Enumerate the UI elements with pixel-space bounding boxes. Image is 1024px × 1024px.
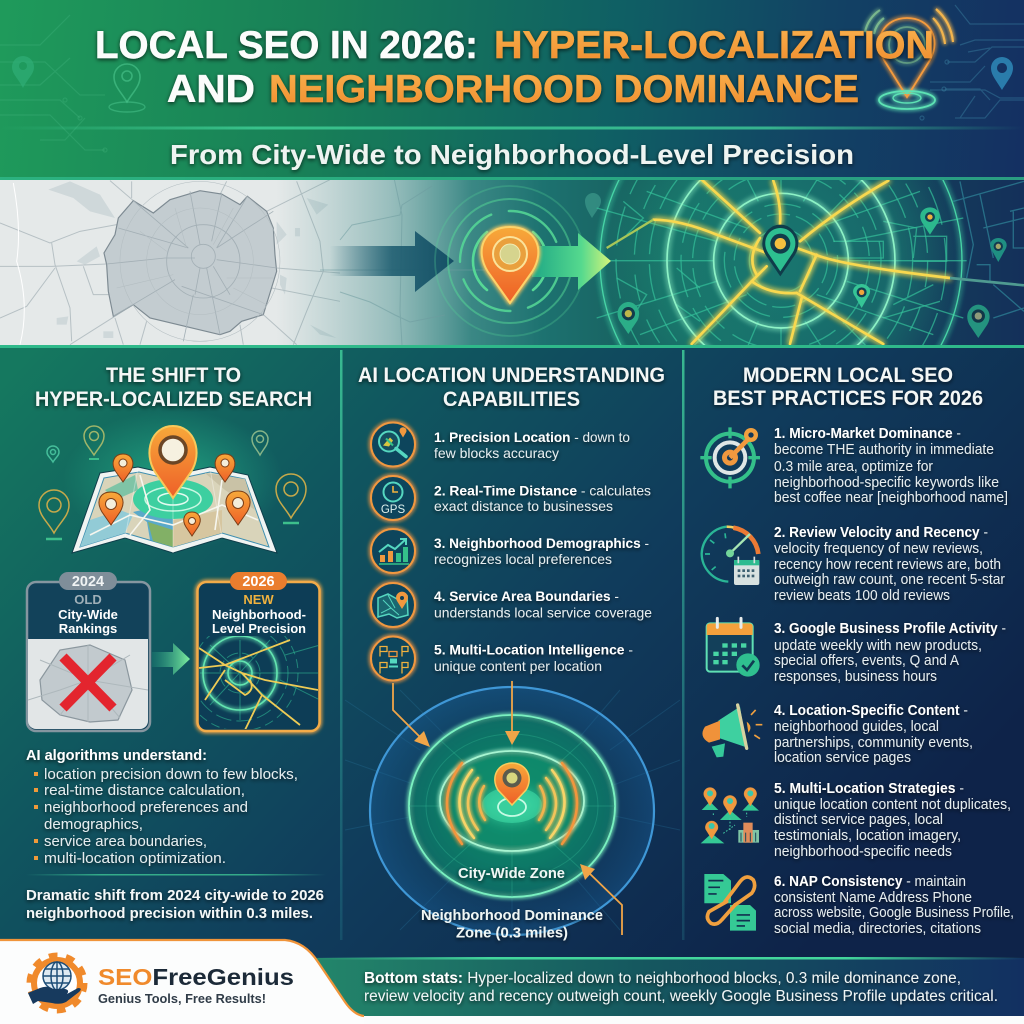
icon: multi-location network [701,787,759,843]
item 2: 2. Real-Time Distance - calculates [434,482,651,498]
icon: right header pin [991,57,1013,90]
practice 4: location service pages [774,750,911,766]
practice 2: review beats 100 old reviews [774,588,950,604]
practice 3: responses, business hours [774,669,937,685]
practice 4: neighborhood guides, local [774,719,939,735]
item 3 [434,535,649,567]
AI algorithms list: demographics, [44,816,143,833]
arrow: dark into pin [330,231,454,292]
practice 3: 3. Google Business Profile Activity - [774,621,1006,637]
item 1: few blocks accuracy [434,445,559,461]
bottom stats bar: Bottom stats: Hyper-localized down to neighborhood blocks, 0.3 mile dominance zone, [364,970,961,987]
item 3: recognizes local preferences [434,551,612,567]
panel: the shift to hyper-localized search [26,363,326,922]
orange bullets [34,772,38,860]
icon: growth chart [379,539,409,564]
zone labels: Zone (0.3 miles) [456,924,568,942]
column dividers [340,350,684,940]
practice 5: 5. Multi-Location Strategies - [774,781,964,797]
logo wordmark [98,964,294,1006]
practice 3: special offers, events, Q and A [774,653,959,669]
title: NEIGHBORHOOD DOMINANCE [269,68,859,111]
practice 5: unique location content not duplicates, [774,797,1011,813]
header banner [0,0,1024,180]
heading [35,363,312,411]
old card labels [58,592,118,636]
practice 4 [774,703,973,766]
item 2 [434,482,651,514]
panel: AI location understanding capabilities [345,363,680,942]
icon: faint map pin [585,193,601,218]
chart: concentric dominance zones [345,680,680,942]
heading: THE SHIFT TO [106,363,241,387]
AI algorithms list: neighborhood preferences and [44,799,248,816]
icon: zone pin [495,763,529,816]
city-wide gray map [0,180,340,345]
icon: outline pins [39,426,306,539]
icon: service area map [378,592,408,618]
practice 2: 2. Review Velocity and Recency - [774,525,988,541]
zone labels: City-Wide Zone [458,865,565,882]
item 5 [434,642,633,674]
heading: MODERN LOCAL SEO [743,363,953,387]
icon: multi-location flags [380,646,408,674]
AI algorithms list: location precision down to few blocks, [44,766,298,783]
old card labels: Rankings [59,621,117,636]
old card labels: City-Wide [58,607,118,622]
new card labels: Level Precision [212,621,306,636]
badge 2026 [230,572,287,590]
item 1 [434,429,630,461]
dramatic shift summary [26,887,324,922]
practice 4: partnerships, community events, [774,735,973,751]
gradient transition overlay [290,180,1024,345]
icon: target [700,427,760,488]
neighborhood street map [596,180,1024,345]
icon: left header pins [12,56,145,112]
icon: magnifier [379,427,406,456]
arcs around central pin [435,186,585,336]
subtitle: From City-Wide to Neighborhood-Level Precision [170,139,854,170]
map band: city-wide to neighborhood [0,180,1024,345]
icon: GPS clock: GPS [381,504,405,516]
icon: glowing header pin [865,9,953,109]
AI algorithms list [26,748,298,867]
icon: logo gear globe hand [28,956,84,1010]
icon: chain link and documents [704,874,756,931]
item 4 [434,588,652,620]
item 4: understands local service coverage [434,604,652,620]
signal arcs [447,763,577,844]
icon: red cross [63,657,113,708]
circuit decoration right [920,5,1024,120]
practice 1 [774,426,1008,506]
practice 1: best coffee near [neighborhood name] [774,490,1008,506]
logo wordmark: SEOFreeGenius [98,964,294,990]
dramatic shift summary: neighborhood precision within 0.3 miles. [26,905,313,922]
heading [713,363,983,410]
panel: modern local SEO best practices [700,363,1014,937]
arrow: green out of pin [532,233,611,290]
badge 2024 [59,572,117,590]
icon: GPS clock [381,482,405,516]
title: LOCAL SEO IN 2026: [95,24,478,67]
faint transition roads [320,178,500,345]
practice 6: consistent Name Address Phone [774,890,972,906]
badge 2024: 2024 [72,574,104,590]
footer [0,940,1024,1024]
arrows: pointing into zones [393,681,622,935]
old card labels: OLD [74,592,102,607]
practice 2: velocity frequency of new reviews, [774,541,983,557]
item 4: 4. Service Area Boundaries - [434,588,619,604]
item 2: exact distance to businesses [434,498,613,514]
practices list [774,426,1014,937]
heading [358,363,665,411]
practice 1: 1. Micro-Market Dominance - [774,426,961,442]
heading: HYPER-LOCALIZED SEARCH [35,387,312,411]
heading: AI LOCATION UNDERSTANDING [358,363,665,387]
item 5: 5. Multi-Location Intelligence - [434,642,633,658]
practice 3 [774,621,1006,685]
white logo panel [0,940,364,1024]
circuit decoration left [0,15,107,152]
item 1: 1. Precision Location - down to [434,429,630,445]
AI algorithms list: AI algorithms understand: [26,748,207,764]
arrow: old to new [152,643,190,675]
zone labels [421,865,603,942]
icon: center teal pin [762,225,798,276]
dramatic shift summary: Dramatic shift from 2024 city-wide to 2026 [26,887,324,904]
new card labels [212,592,306,636]
title [95,24,934,111]
practice 5: neighborhood-specific needs [774,844,952,860]
icon: small orange pins on map [99,454,250,536]
practice 6: 6. NAP Consistency - maintain [774,874,966,890]
icon: folded map [72,467,277,553]
practice 3: update weekly with new products, [774,638,982,654]
far right dim streets [953,181,1024,318]
capability list [434,429,652,674]
yellow roads [653,180,950,344]
icon: calendar with check [707,618,760,677]
practice 1: become THE authority in immediate [774,442,994,458]
logo wordmark: Genius Tools, Free Results! [98,992,266,1006]
heading: BEST PRACTICES FOR 2026 [713,386,983,410]
item 3: 3. Neighborhood Demographics - [434,535,649,551]
practice 6: social media, directories, citations [774,921,981,937]
practice 1: 0.3 mile area, optimize for [774,459,933,475]
item 5: unique content per location [434,658,602,674]
bottom stats bar [310,957,1024,1016]
practice 2 [774,525,1005,604]
zone labels: Neighborhood Dominance [421,907,603,924]
practice 5 [774,781,1011,860]
heading: CAPABILITIES [443,387,580,411]
practice 2: outweigh raw count, one recent 5-star [774,572,1005,588]
icon: small map pins [618,207,1007,338]
practice 2: recency how recent reviews are, both [774,557,1001,573]
AI algorithms list: real-time distance calculation, [44,782,245,799]
icon: large orange pin [149,426,197,498]
title: HYPER-LOCALIZATION [494,24,934,67]
halo behind map [63,410,283,550]
practice 6 [774,874,1014,937]
new card labels: Neighborhood- [212,607,306,622]
2024 old card [27,572,150,731]
icon: orange central pin [482,227,538,303]
2026 new card [182,572,320,731]
practice 1: neighborhood-specific keywords like [774,475,999,491]
new card labels: NEW [243,592,274,607]
mini neighborhood map [199,636,318,729]
practice 5: distinct service pages, local [774,812,943,828]
AI algorithms list: multi-location optimization. [44,850,226,867]
icon rings [371,422,415,680]
title: AND [167,68,255,111]
AI algorithms list: service area boundaries, [44,833,207,850]
icon: gauge and calendar [702,527,759,585]
glowing rings [596,180,968,345]
bottom stats bar: review velocity and recency outweigh count, weekly Google Business Profile updates critical. [364,988,998,1005]
badge 2026: 2026 [242,574,275,590]
practice 5: testimonials, location imagery, [774,828,961,844]
practice 4: 4. Location-Specific Content - [774,703,968,719]
glow behind neighborhood rings [618,180,953,345]
icon: megaphone [702,705,762,757]
